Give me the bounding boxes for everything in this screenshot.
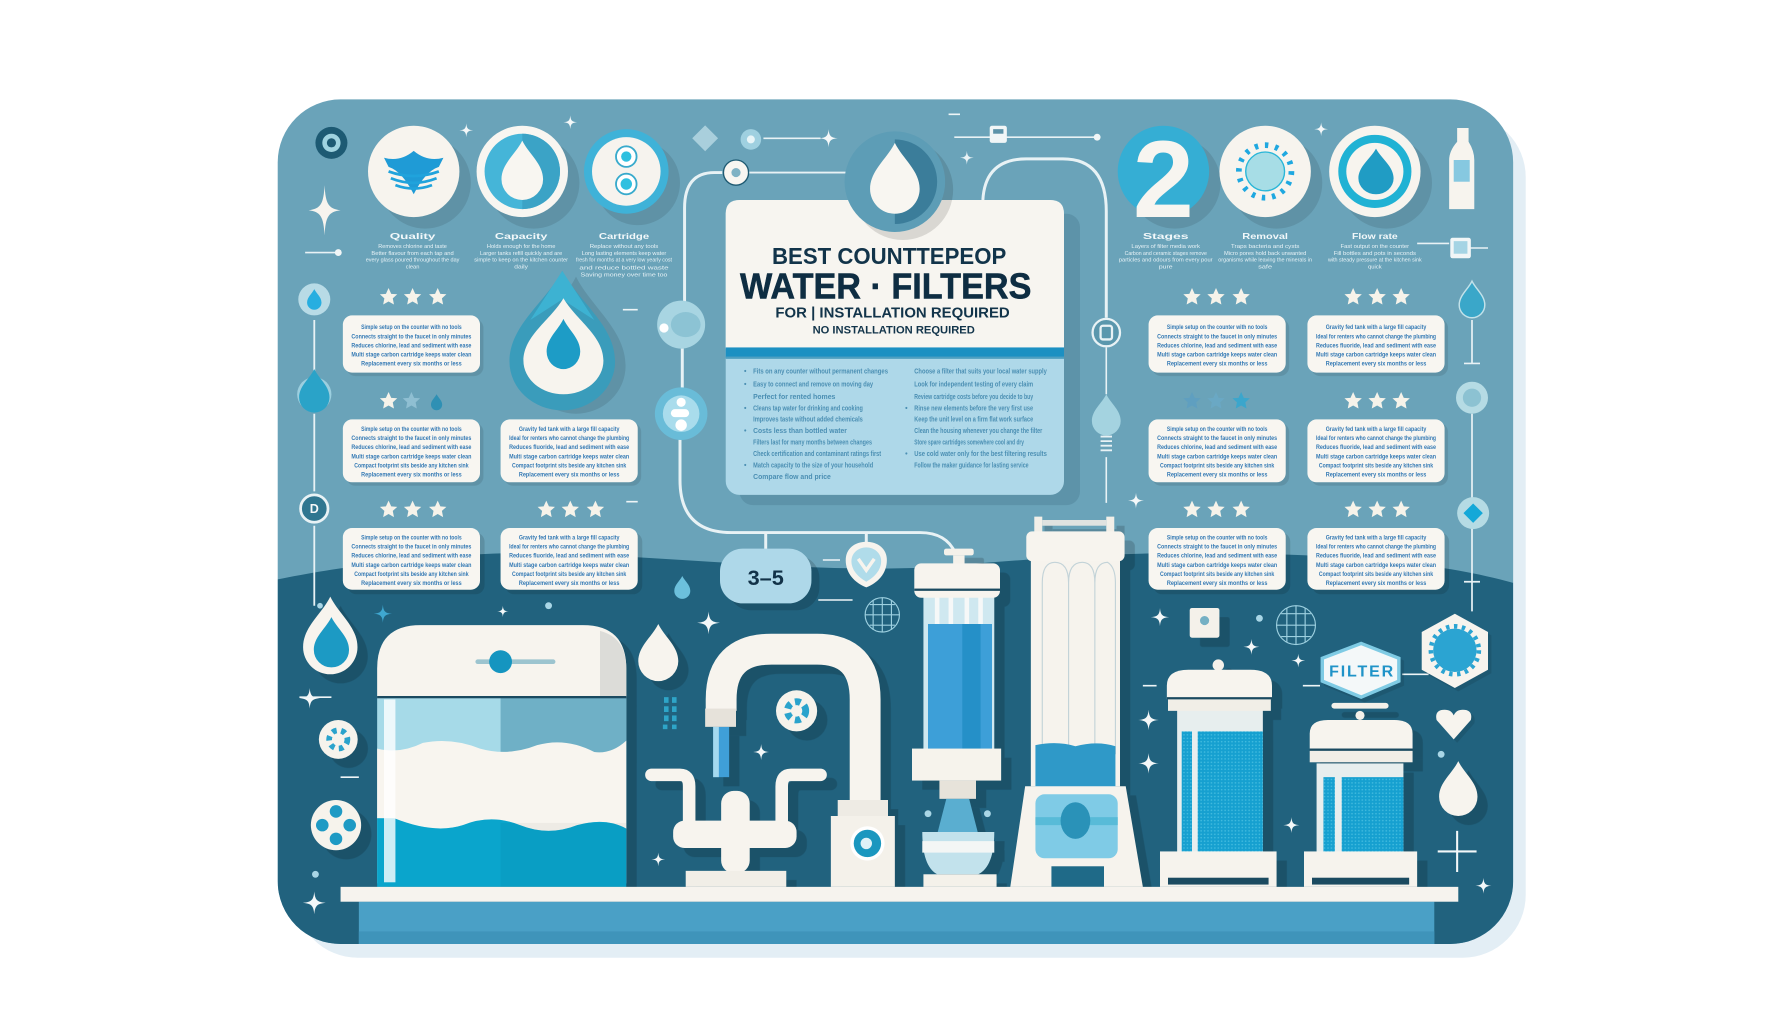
bullet column left: Improves taste without added chemicals [753,416,863,424]
card: right one row three: Connects straight to the faucet in only minutes [1157,544,1278,551]
card: left row three: Connects straight to the faucet in only minutes [351,544,472,551]
caption: feature one: Quality [390,232,436,241]
pipes and connectors [305,137,1488,611]
card: middle row two: Ideal for renters who cannot change the plumbing [509,435,629,442]
caption: feature three: Saving money over time too [581,273,668,279]
icon: diamond and flower row [692,125,838,151]
caption: feature five: Traps bacteria and cysts [1231,244,1300,250]
icon: drop circle [477,126,579,229]
pipe node top [723,160,749,185]
card: right one row one: Replacement every six months or less [1167,361,1268,368]
card: middle row three: Reduces fluoride, lead and sediment with ease [509,553,630,560]
card: right one row one [1149,315,1286,373]
callout: 3-5 pill: 3–5 [748,565,784,590]
card: right one row two: Connects straight to the faucet in only minutes [1157,435,1278,442]
card: right one row one: Connects straight to the faucet in only minutes [1157,333,1278,340]
card: right two row three: Multi stage carbon cartridge keeps water clean [1316,562,1436,569]
card: right one row one: Simple setup on the counter with no tools [1167,324,1268,331]
card: middle row three [501,528,642,594]
icon: small glass square [1450,238,1471,258]
caption: feature six: quick [1368,265,1382,271]
icon: small blue drop [674,576,690,599]
card: right one row three: Simple setup on the counter with no tools [1167,534,1268,541]
card: right one row two: Compact footprint sits beside any kitchen sink [1160,462,1275,469]
bullet column right: Follow the maker guidance for lasting service [914,461,1029,469]
card: right two row two: Ideal for renters who cannot change the plumbing [1316,435,1436,442]
card: left row one: Connects straight to the faucet in only minutes [351,333,472,340]
icon: bottle [1449,128,1474,209]
bullet column right: • [905,450,908,458]
bullet column left [744,368,888,481]
icon: shield check [846,542,887,587]
card: right one row two: Replacement every six months or less [1167,472,1268,479]
card: left row three: Simple setup on the counter with no tools [361,534,462,541]
card: left row two: Replacement every six months or less [361,472,462,479]
caption: feature three: Cartridge [599,232,650,241]
filter column three [1160,659,1277,887]
card: left row two: Multi stage carbon cartridge keeps water clean [351,453,472,460]
small bubbles [312,602,1445,878]
icon: speckled disc left [319,720,358,759]
filter column two tall [1010,517,1143,887]
stars row two left [380,392,442,410]
left timeline nodes [297,283,331,522]
card: left row two: Compact footprint sits beside any kitchen sink [354,462,469,469]
icon: title drop badge [845,131,953,240]
card: middle row two: Reduces fluoride, lead and sediment with ease [509,444,630,451]
card: right one row two: Multi stage carbon cartridge keeps water clean [1157,453,1277,460]
bullet column right: Review cartridge costs before you decide to buy [914,393,1033,401]
card: right one row three: Multi stage carbon cartridge keeps water clean [1157,562,1277,569]
caption: feature two: Larger tanks refill quickly and are [480,251,562,257]
card: right one row three [1149,528,1290,594]
title heading: WATER · FILTERS [740,265,1031,306]
card: left row three: Replacement every six months or less [361,580,462,587]
icon: number two circle: 2 [1133,119,1194,241]
stars row three left [380,501,604,517]
card: left row three [343,528,485,594]
filter column four [1304,703,1417,887]
icon: drop with blue centre [303,597,357,674]
card: right one row three: Replacement every six months or less [1167,580,1268,587]
bullet column right: Choose a filter that suits your local water supply [914,368,1047,376]
caption: feature one [366,232,460,271]
faucet [651,649,895,887]
bullet column right: Keep the unit level on a firm flat work surface [914,416,1033,424]
card: middle row three: Gravity fed tank with a large fill capacity [519,534,620,541]
caption: feature one: Better flavour from each tap and [371,251,454,257]
card: left row two: Simple setup on the counter with no tools [361,426,462,433]
card: right two row three [1307,528,1449,594]
left timeline nodes: D [310,502,319,516]
icon: wave circle [368,126,471,229]
card: right one row two: Simple setup on the counter with no tools [1167,426,1268,433]
background panel [278,99,1526,958]
bullet column left: Compare flow and price [753,473,831,481]
bullet column left: Match capacity to the size of your household [753,461,873,469]
caption: feature four: Layers of filter media work [1131,244,1200,250]
card: right two row one: Replacement every six months or less [1326,361,1427,368]
card: right two row two [1307,419,1445,482]
bullet column left: • [744,427,747,435]
card: right two row one: Reduces fluoride, lead and sediment with ease [1316,342,1436,349]
bullet column left: Cleans tap water for drinking and cooking [753,404,863,412]
card: right two row three: Compact footprint sits beside any kitchen sink [1319,571,1434,578]
card: right one row one: Multi stage carbon cartridge keeps water clean [1157,352,1277,359]
dashes [299,114,1451,777]
card: left row one: Simple setup on the counter with no tools [361,324,462,331]
icon: sparkle left [309,185,341,235]
stars right group [1183,288,1410,517]
bullet column left: Check certification and contaminant ratings first [753,450,882,458]
caption: feature five: safe [1258,265,1272,271]
card: right two row one: Multi stage carbon cartridge keeps water clean [1316,352,1436,359]
card: right two row three: Reduces fluoride, lead and sediment with ease [1316,553,1436,560]
caption: feature three [576,232,673,279]
card: middle row three: Multi stage carbon cartridge keeps water clean [509,562,629,569]
caption: feature three: Replace without any tools [590,244,659,250]
bullet column left: • [744,404,747,412]
icon: four dot disc [311,800,361,850]
caption: feature four: pure [1159,265,1173,271]
caption: feature two: Capacity [495,232,548,241]
card: right two row one: Gravity fed tank with a large fill capacity [1326,324,1427,331]
badge: filter label [1322,643,1399,697]
caption: feature five: Removal [1242,232,1288,241]
sparkles lower [299,115,1491,914]
icon: hexagon virus [1422,614,1488,688]
counter base [341,887,1458,944]
caption: feature six: Fast output on the counter [1341,244,1409,250]
card: middle row two: Multi stage carbon cartridge keeps water clean [509,453,629,460]
bullet column left: Filters last for many months between changes [753,439,872,447]
glass bubbles on pipe [655,301,707,440]
panel: main title card [726,200,1080,505]
bullet column left: Fits on any counter without permanent changes [753,368,888,376]
caption: feature five [1218,232,1312,271]
title heading: FOR | INSTALLATION REQUIRED [775,306,1010,322]
card: left row two: Reduces chlorine, lead and sediment with ease [351,444,472,451]
title heading [740,243,1031,337]
card: right two row two: Multi stage carbon cartridge keeps water clean [1316,453,1436,460]
caption: feature two: daily [514,265,528,271]
bullet column left: • [744,380,747,388]
card: right two row one [1307,315,1445,373]
card: right two row two: Replacement every six months or less [1326,472,1427,479]
card: right one row two: Reduces chlorine, lead and sediment with ease [1157,444,1278,451]
caption: feature four [1119,232,1213,271]
card: middle row two: Compact footprint sits beside any kitchen sink [512,462,627,469]
card: right two row three: Ideal for renters who cannot change the plumbing [1316,544,1436,551]
card: middle row two: Replacement every six months or less [519,472,620,479]
filter column one [912,549,1001,887]
card: left row three: Compact footprint sits beside any kitchen sink [354,571,469,578]
card: left row two [343,419,480,482]
caption: feature six: Flow rate [1352,232,1398,241]
card: right one row three: Reduces chlorine, lead and sediment with ease [1157,553,1278,560]
caption: feature six: with steady pressure at the kitchen sink [1328,258,1422,264]
icon: number two circle [1118,119,1221,241]
bullet column left: • [744,461,747,469]
card: right two row three: Gravity fed tank with a large fill capacity [1326,534,1427,541]
caption: feature four: Stages [1143,232,1190,241]
icon: globes [865,598,1315,645]
card: right two row two: Compact footprint sits beside any kitchen sink [1319,462,1434,469]
card: middle row three: Replacement every six months or less [519,580,620,587]
icon: white drop right [1439,761,1477,816]
caption: feature two: simple to keep on the kitchen counter [474,258,568,264]
icon: white drop [638,624,678,681]
bullet column left: Easy to connect and remove on moving day [753,380,873,388]
card: middle row three: Compact footprint sits beside any kitchen sink [512,571,627,578]
water tank [377,625,626,887]
badge: filter label: FILTER [1329,664,1394,681]
card: middle row two: Gravity fed tank with a large fill capacity [519,426,620,433]
caption: feature six [1328,232,1422,271]
caption: feature three: Long lasting elements keep water [582,251,667,257]
bullet column right: Store spare cartridges somewhere cool and dry [914,439,1024,447]
icon: sediment specks [663,697,677,729]
icon: speckled disc faucet [776,690,817,731]
bullet column left: • [744,368,747,376]
title heading: NO INSTALLATION REQUIRED [813,325,975,337]
card: right one row one: Reduces chlorine, lead and sediment with ease [1157,342,1278,349]
icon: twin circle badge [584,129,680,225]
caption: feature two [474,232,568,271]
icon: top right square [960,126,1101,165]
icon: ringed drop circle [1329,126,1432,229]
caption: feature one: Removes chlorine and taste [378,244,447,250]
bullet column right: Use cold water only for the best filtering results [914,450,1047,458]
caption: feature five: organisms while leaving the minerals in [1218,258,1312,264]
card: right one row three: Compact footprint sits beside any kitchen sink [1160,571,1275,578]
card: middle row two [501,419,638,482]
icon: small dark virus badge [315,127,347,256]
caption: feature three: and reduce bottled waste [579,266,669,272]
callout: 3-5 pill [720,549,819,610]
card: left row one: Replacement every six months or less [361,361,462,368]
bullet column right: Clean the housing whenever you change the filter [914,427,1042,435]
caption: feature one: clean [406,265,420,271]
caption: feature five: Micro pores hold back unwanted [1224,251,1306,257]
card: left row two: Connects straight to the faucet in only minutes [351,435,472,442]
caption: feature three: fresh for months at a very low yearly cost [576,258,673,264]
right timeline nodes [1456,281,1489,529]
bullet column right: Look for independent testing of every claim [914,380,1033,388]
card: left row three: Reduces chlorine, lead and sediment with ease [351,553,472,560]
bullet column right: Rinse new elements before the very first use [914,404,1033,412]
bullet column left: Costs less than bottled water [753,427,847,435]
caption: feature four: particles and odours from every pour [1119,258,1213,264]
icon: heart [1436,710,1471,739]
icon: large water drop [509,271,626,414]
caption: feature two: Holds enough for the home [487,244,556,250]
bullet column right: • [905,404,908,412]
caption: feature four: Carbon and ceramic stages remove [1125,251,1207,257]
bullet column left: Perfect for rented homes [753,393,835,401]
pipe node right [1092,319,1121,450]
icon: small square [1190,608,1219,638]
card: left row three: Multi stage carbon cartridge keeps water clean [351,562,472,569]
card: left row one [343,315,480,373]
bullet column right [905,368,1047,469]
card: right two row two: Reduces fluoride, lead and sediment with ease [1316,444,1436,451]
icon: virus circle [1219,126,1322,229]
card: right two row three: Replacement every six months or less [1326,580,1427,587]
card: left row one: Reduces chlorine, lead and sediment with ease [351,342,472,349]
caption: feature six: Fill bottles and pots in seconds [1334,251,1416,257]
card: left row one: Multi stage carbon cartridge keeps water clean [351,352,472,359]
caption: feature one: every glass poured throughout the day [366,258,460,264]
card: right one row two [1149,419,1286,482]
stars row one left [380,288,446,305]
card: right two row one: Ideal for renters who cannot change the plumbing [1316,333,1436,340]
card: right two row two: Gravity fed tank with a large fill capacity [1326,426,1427,433]
card: middle row three: Ideal for renters who cannot change the plumbing [509,544,629,551]
title heading: BEST COUNTTEPEOP [772,243,1006,269]
